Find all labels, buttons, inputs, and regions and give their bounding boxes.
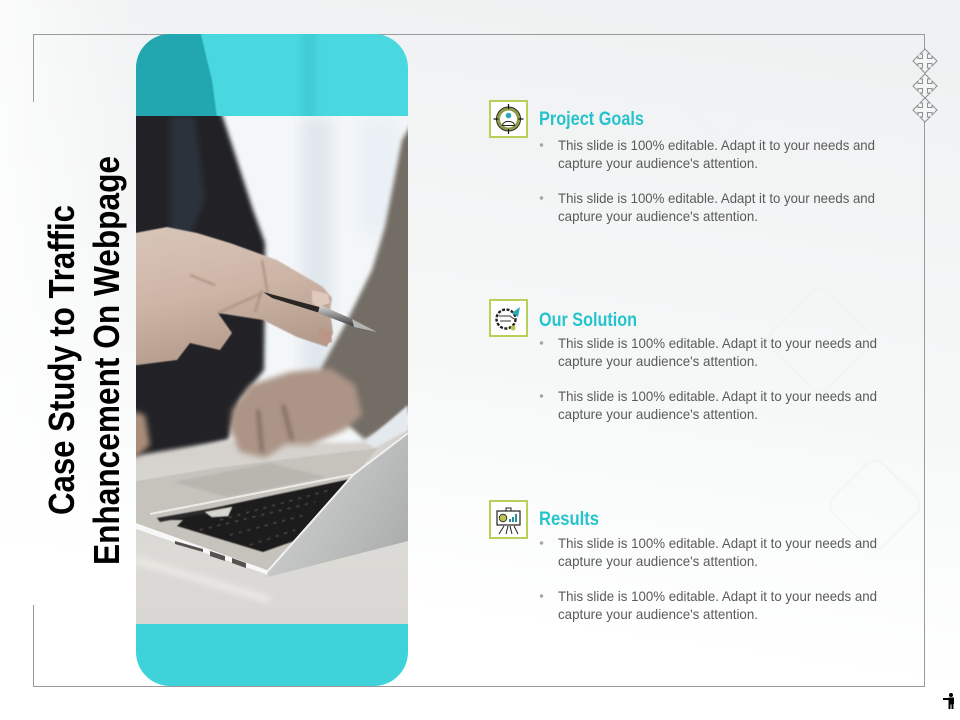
bullets: results: This slide is 100% editable. Adapt it to your needs and [558, 535, 877, 551]
bullets: results: capture your audience's attention. [558, 553, 758, 569]
panel: our solution [490, 300, 877, 422]
title [41, 156, 127, 565]
bullets: project goals: capture your audience's attention. [558, 155, 758, 171]
bullets: results: This slide is 100% editable. Adapt it to your needs and [558, 588, 877, 604]
fingernails [312, 290, 332, 345]
pointing hand [130, 227, 333, 366]
icon: target with person [490, 101, 527, 137]
blurred left cuff [130, 410, 150, 458]
keyboard [157, 479, 350, 552]
icon: gear with idea bulb [490, 300, 527, 336]
teal top band [136, 34, 408, 116]
icon: presentation board [490, 501, 527, 538]
base front edge [130, 521, 268, 575]
bullets: project goals: This slide is 100% editable. Adapt it to your needs and [558, 137, 875, 153]
table reflection [136, 560, 270, 600]
bullets: project goals [540, 137, 875, 224]
teal bottom band [136, 624, 408, 686]
pen [263, 292, 377, 332]
title: Enhancement On Webpage [86, 156, 127, 565]
bullets: results [540, 535, 877, 622]
table [136, 424, 408, 624]
bullets: our solution [540, 335, 877, 422]
laptop lid [267, 428, 412, 577]
bullets: our solution: This slide is 100% editable. Adapt it to your needs and [558, 388, 877, 404]
bullets: results: capture your audience's attention. [558, 606, 758, 622]
bullets: our solution: capture your audience's attention. [558, 353, 758, 369]
bullets: our solution: This slide is 100% editable. Adapt it to your needs and [558, 335, 877, 351]
glare strip [365, 405, 408, 448]
panel: results [490, 501, 877, 622]
right hand blurred [230, 368, 362, 458]
heading: project goals: Project Goals [539, 109, 644, 130]
trackpad [173, 463, 327, 497]
panel: project goals [490, 101, 875, 224]
heading: results: Results [539, 509, 599, 530]
bullets: project goals: capture your audience's attention. [558, 208, 758, 224]
background pattern [676, 46, 924, 554]
panel: teal rounded backing [130, 26, 408, 686]
heading: our solution: Our Solution [539, 310, 637, 331]
icon: arrow crosses [913, 49, 937, 122]
title: Case Study to Traffic [41, 205, 82, 515]
bullets: project goals: This slide is 100% editable. Adapt it to your needs and [558, 190, 875, 206]
bullets: our solution: capture your audience's attention. [558, 406, 758, 422]
icon: presenter figure [943, 693, 954, 709]
finger creases [190, 260, 268, 313]
hinge highlight [150, 474, 355, 514]
dark suit [136, 116, 269, 459]
gray jacket [319, 124, 408, 441]
photo: hands pointing at laptop [136, 116, 408, 624]
laptop base [130, 448, 378, 575]
